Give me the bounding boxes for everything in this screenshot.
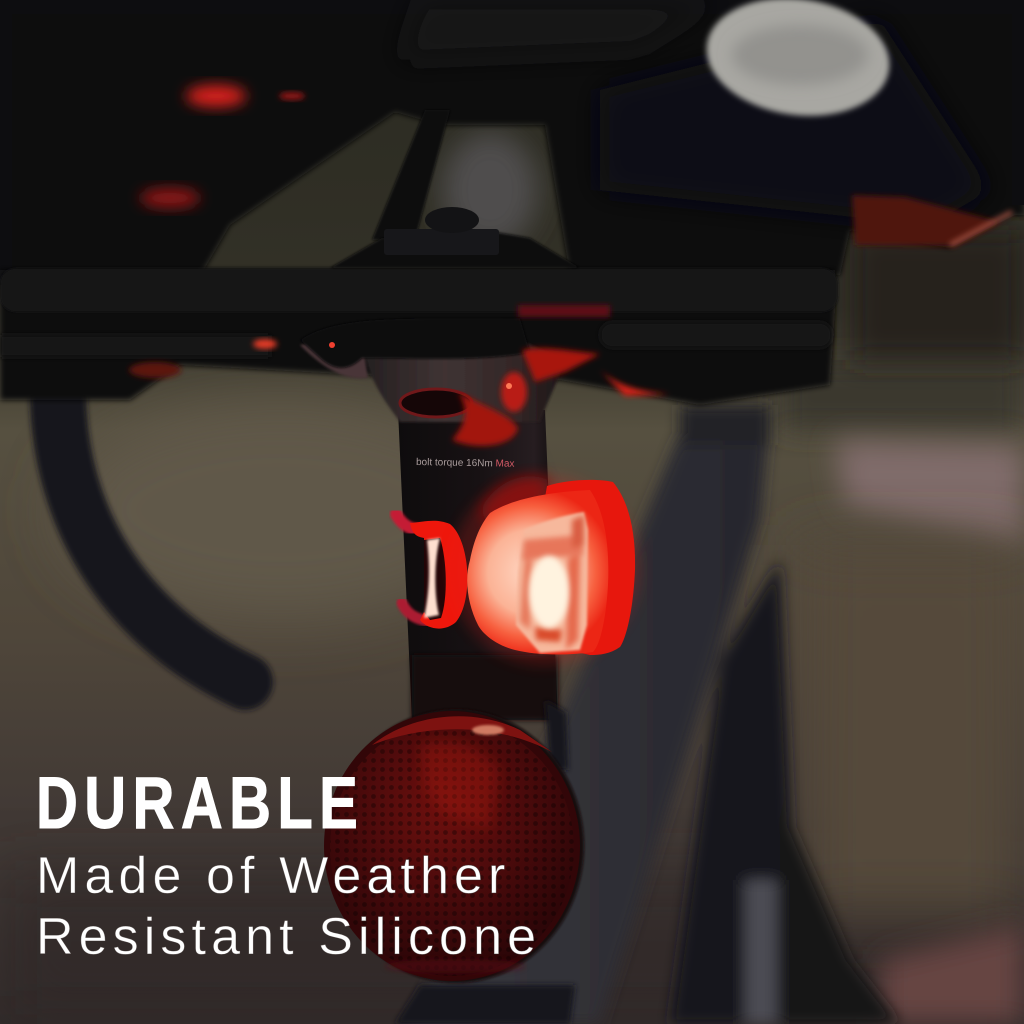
- rear light: glowing silicone body: [467, 480, 635, 655]
- body text: [36, 847, 541, 966]
- reflector: round red disc: [324, 709, 584, 983]
- seat clamp: thin strut: [372, 110, 450, 240]
- frame base: dark tube below reflector: [395, 985, 575, 1024]
- red reflections on saddle and clamp: [129, 85, 670, 396]
- saddle: dark upper shape: [0, 0, 1024, 285]
- seatpost tube: [300, 318, 568, 770]
- handlebar: blurred curved tube on left: [58, 395, 245, 682]
- body text: Made of Weather: [36, 847, 510, 905]
- bike frame: blurred tube on right: [410, 405, 900, 1024]
- post lettering: bolt torque 16Nm Max: [416, 457, 515, 470]
- headline: DURABLE: [36, 763, 364, 844]
- seat clamp: glossy head: [364, 340, 565, 422]
- saddle red reflection right: [852, 195, 1000, 246]
- reflector: bright glints: [420, 741, 500, 830]
- rear light: LED housing: [516, 512, 588, 653]
- rear light: glow: [450, 475, 640, 665]
- body text: Resistant Silicone: [36, 908, 541, 966]
- saddle bag rails: horizontal black bands: [0, 207, 838, 405]
- silicone strap and small side light: [396, 514, 467, 629]
- saddle badge: [699, 0, 897, 127]
